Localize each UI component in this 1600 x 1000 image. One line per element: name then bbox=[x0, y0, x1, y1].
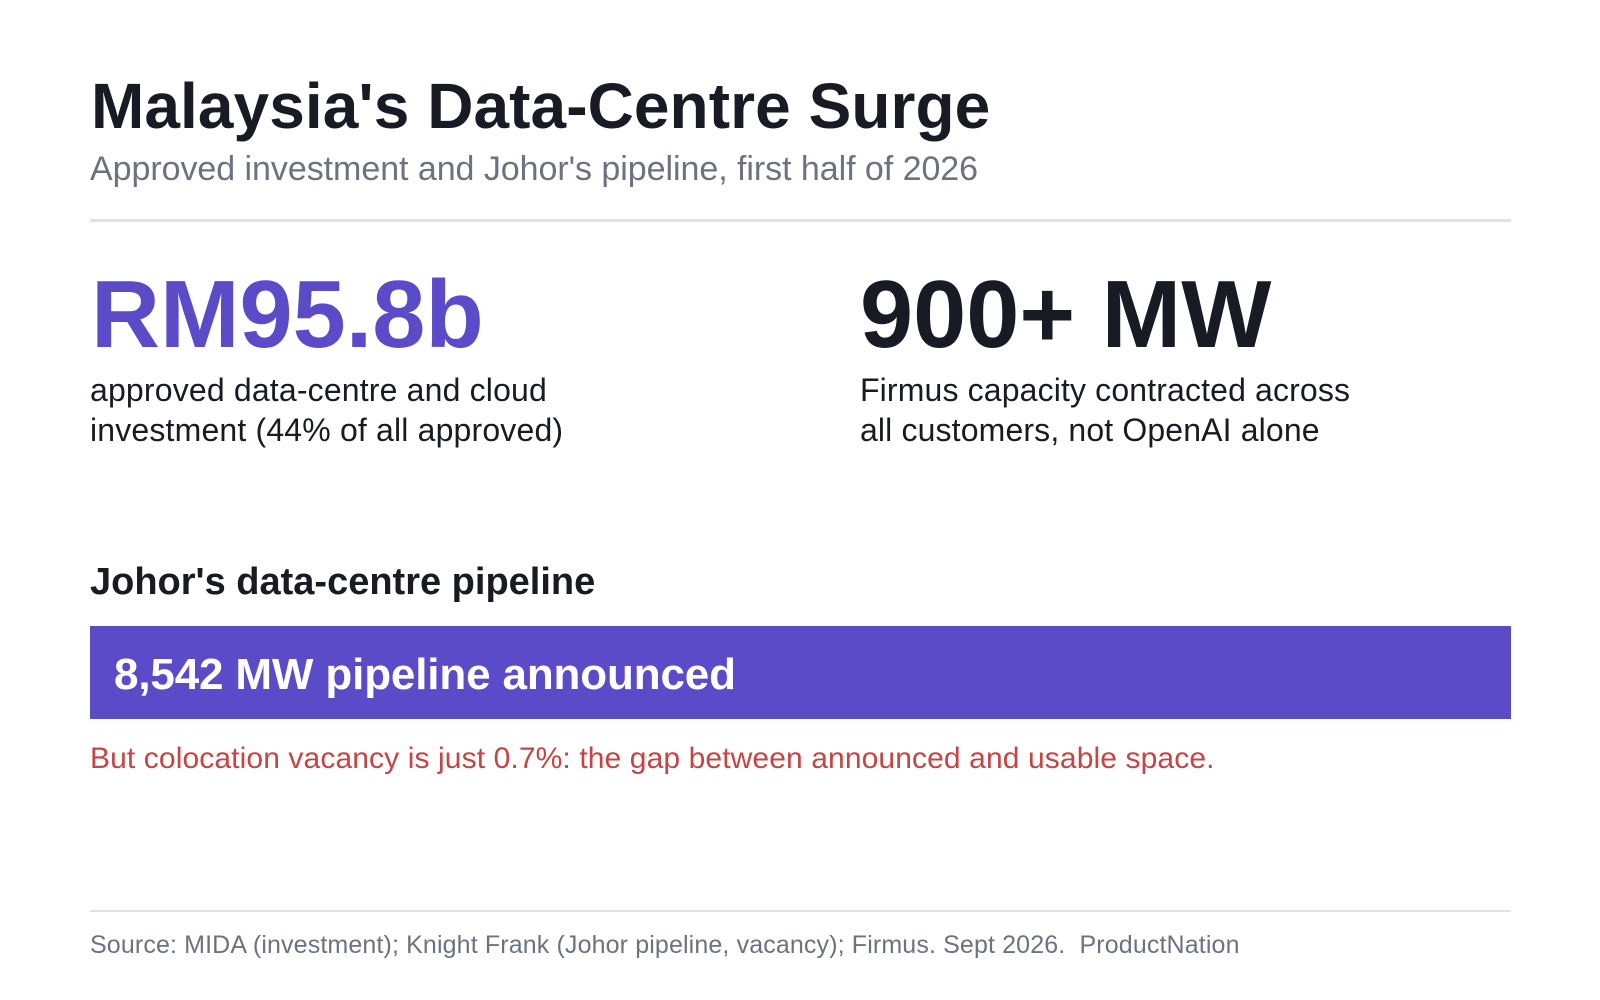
section heading: Johor's data-centre pipeline bbox=[90, 561, 595, 603]
footer divider bbox=[90, 910, 1511, 912]
stat: contracted capacity bbox=[860, 262, 1350, 448]
stat description: investment (44% of all approved) bbox=[90, 412, 563, 448]
stat description: Firmus capacity contracted across bbox=[860, 372, 1350, 408]
vacancy callout: But colocation vacancy is just 0.7%: the gap between announced and usable space. bbox=[90, 742, 1215, 775]
title: Malaysia's Data-Centre Surge bbox=[91, 70, 990, 142]
source note: Source: MIDA (investment); Knight Frank (Johor pipeline, vacancy); Firmus. Sept 2026. ProductNation bbox=[90, 931, 1240, 959]
pipeline bar bbox=[90, 626, 1511, 719]
stat description: all customers, not OpenAI alone bbox=[860, 412, 1320, 448]
stat description bbox=[860, 372, 1350, 448]
bar label: 8,542 MW pipeline announced bbox=[114, 650, 736, 699]
stat value: 900+ MW: 900+ MW bbox=[860, 262, 1271, 368]
stat value: RM95.8b: RM95.8b bbox=[91, 262, 484, 368]
stat: approved investment bbox=[90, 262, 563, 448]
stat description: approved data-centre and cloud bbox=[90, 372, 547, 408]
stat description bbox=[90, 372, 563, 448]
header divider bbox=[90, 219, 1511, 222]
subtitle: Approved investment and Johor's pipeline, first half of 2026 bbox=[90, 150, 978, 188]
